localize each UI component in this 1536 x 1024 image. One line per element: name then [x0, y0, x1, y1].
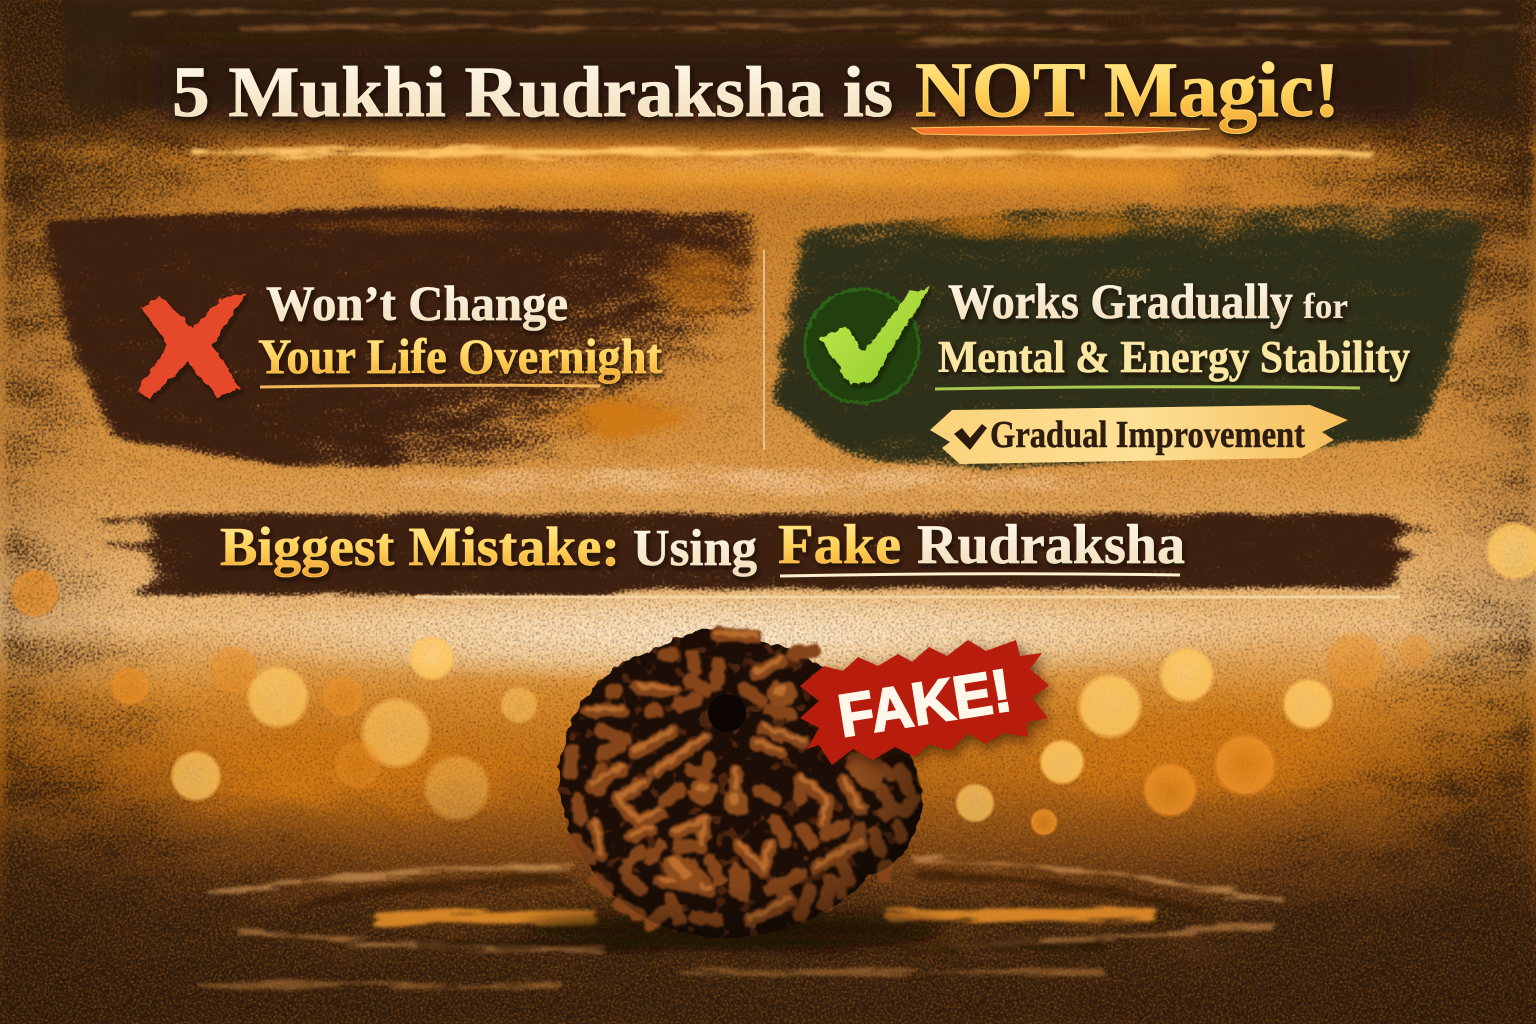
bead knobs — [570, 632, 915, 925]
divider — [763, 250, 765, 450]
bead hole — [708, 694, 746, 732]
heading: biggest mistake: Fake — [778, 514, 901, 576]
panel: mistake band — [95, 512, 1440, 592]
right underline — [935, 387, 1360, 389]
badge: fake: FAKE! — [834, 656, 1016, 750]
heading: biggest mistake — [220, 514, 1185, 577]
bead body — [560, 629, 922, 938]
heading: won't change: Won’t Change — [266, 275, 568, 331]
heading: works gradually: for — [1303, 286, 1348, 326]
title underline — [912, 126, 1210, 135]
heading: biggest mistake: Rudraksha — [917, 514, 1185, 576]
heading: works gradually — [938, 273, 1410, 382]
title: 5 Mukhi Rudraksha is — [172, 52, 893, 132]
icon: green check — [805, 287, 930, 403]
bokeh lights — [10, 521, 1536, 836]
swirl ripples — [200, 860, 1280, 985]
badge: gradual improvement — [930, 405, 1348, 464]
bead shading — [560, 629, 922, 938]
badge: gradual improvement: Gradual Improvement — [990, 414, 1305, 456]
heading: biggest mistake: Biggest Mistake: — [220, 516, 620, 577]
panel: right green brush — [770, 200, 1495, 474]
left underline — [260, 385, 600, 387]
badge: fake — [800, 640, 1049, 765]
heading: won't change: Your Life Overnight — [258, 328, 662, 384]
title — [172, 46, 1340, 133]
heading: works gradually: Mental & Energy Stability — [938, 332, 1410, 382]
mistake underlines — [415, 574, 1400, 597]
heading: won't change — [258, 275, 662, 384]
panel glow: orange dissolve — [90, 200, 1380, 475]
icon: red X — [137, 294, 246, 398]
heading: works gradually: Works Gradually — [948, 273, 1293, 329]
rudraksha bead — [525, 629, 945, 948]
heading: biggest mistake: Using — [633, 520, 757, 577]
title: NOT Magic! — [915, 46, 1340, 133]
title band — [60, 0, 1536, 188]
panel: left dark brush — [40, 205, 762, 470]
